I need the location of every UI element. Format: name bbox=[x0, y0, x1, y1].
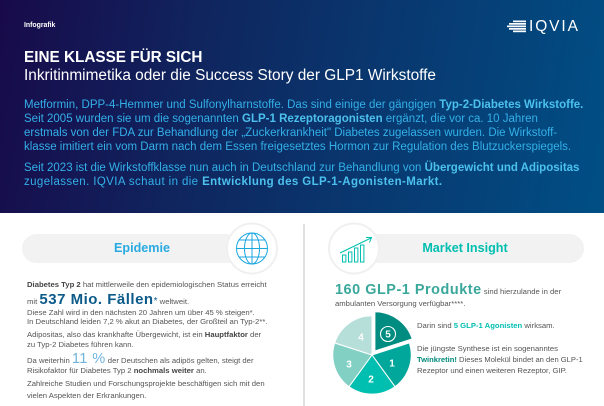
title: EINE KLASSE FÜR SICH bbox=[24, 49, 202, 66]
heading pill: Epidemie bbox=[22, 234, 240, 263]
intro paragraph 1: erstmals von der FDA zur Behandlung der „Zuckerkrankheit" Diabetes zugelassen wurden. Die Wirkstoff- bbox=[24, 127, 557, 139]
subtitle: Inkritinmimetika oder die Success Story der GLP1 Wirkstoffe bbox=[24, 66, 436, 84]
column divider bbox=[303, 224, 305, 406]
text: 11 percent: Da weiterhin 11 % der Deutschen als adipös gelten, steigt der bbox=[27, 350, 254, 366]
text: Twinkretin: Rezeptor und einen weiteren Rezeptor, GIP. bbox=[417, 366, 567, 374]
pie labels: 2 bbox=[368, 374, 374, 386]
text: Germany: In Deutschland leiden 7,2 % akut an Diabetes, der Großteil an Typ-2**. bbox=[27, 317, 267, 326]
text: Twinkretin bbox=[417, 344, 583, 374]
icon: logo stripes bbox=[507, 20, 526, 32]
text: Twinkretin: Die jüngste Synthese ist ein sogenanntes bbox=[417, 344, 558, 352]
logo: IQVIA bbox=[507, 18, 580, 35]
text: studies line 2: vielen Aspekten der Erkrankungen. bbox=[27, 390, 146, 400]
pie chart bbox=[333, 312, 412, 394]
text: availability: ambulanten Versorgung verfügbar****. bbox=[335, 298, 465, 308]
pie labels bbox=[346, 326, 396, 386]
text: 537 Mio. Fällen: mit 537 Mio. Fällen* weltweit. bbox=[27, 290, 189, 308]
slice 3 bbox=[333, 343, 372, 387]
intro paragraph 1: klasse imitiert ein vom Darm nach dem Essen freigesetztes Hormon zur Regulation des Blutzuckerspiegels. bbox=[24, 141, 571, 153]
panel: Epidemie bbox=[22, 222, 278, 400]
heading pill: Market Insight bbox=[349, 234, 584, 263]
text: Twinkretin: Twinkretin! Dieses Molekül bindet an den GLP-1 bbox=[417, 354, 583, 364]
text: studies: Zahlreiche Studien und Forschungsprojekte beschäftigen sich mit den bbox=[27, 378, 265, 388]
pie labels: 3 bbox=[346, 360, 352, 370]
intro paragraph 2: Seit 2023 ist die Wirkstoffklasse nun auch in Deutschland zur Behandlung von Übergewicht und Adipositas bbox=[24, 162, 579, 174]
slice 2 bbox=[349, 355, 395, 394]
intro paragraph 2: zugelassen. IQVIA schaut in die Entwicklung des GLP-1-Agonisten-Markt. bbox=[24, 176, 442, 188]
slice 4 bbox=[335, 316, 372, 355]
text: 5 GLP-1 Agonisten: Darin sind 5 GLP-1 Agonisten wirksam. bbox=[417, 320, 555, 330]
header panel bbox=[0, 0, 604, 213]
pie labels: 5 bbox=[385, 330, 391, 340]
heading pill: Market Insight: Market Insight bbox=[422, 241, 508, 255]
intro paragraph 1: Seit 2005 wurden sie um die sogenannten GLP-1 Rezeptoragonisten ergänzt, die vor ca. 10 Jahren bbox=[24, 113, 538, 125]
slice 5 bbox=[375, 312, 412, 351]
icon: globe bbox=[228, 222, 278, 274]
text: status: Diabetes Typ 2 hat mittlerweile den epidemiologischen Status erreicht bbox=[27, 280, 267, 289]
label: Infografik: Infografik bbox=[24, 22, 55, 29]
text: Adipositas: Adipositas, also das krankhafte Übergewicht, ist ein Hauptfaktor der bbox=[27, 330, 261, 338]
intro paragraph 1 bbox=[24, 99, 583, 153]
pie labels: 1 bbox=[389, 358, 395, 370]
text: risk factor: Risikofaktor für Diabetes Typ 2 nochmals weiter an. bbox=[27, 366, 207, 374]
panel: Market Insight bbox=[328, 222, 584, 394]
heading pill: Epidemie: Epidemie bbox=[114, 241, 170, 255]
text: growth: Diese Zahl wird in den nächsten 20 Jahren um über 45 % steigen*. bbox=[27, 308, 255, 316]
intro paragraph 2 bbox=[24, 160, 579, 188]
intro paragraph 1: Metformin, DPP-4-Hemmer und Sulfonylharnstoffe. Das sind einige der gängigen Typ-2-Diabetes Wirkstoffe. bbox=[24, 99, 583, 111]
text: 160 GLP-1 Produkte: 160 GLP-1 Produkte sind hierzulande in der bbox=[335, 282, 561, 298]
slice 1 bbox=[372, 343, 411, 387]
pie labels: 4 bbox=[358, 332, 364, 344]
logo wordmark: IQVIA bbox=[529, 18, 580, 35]
icon: rising bars bbox=[328, 222, 378, 274]
text: Adipositas line 2: zu Typ-2 Diabetes führen kann. bbox=[27, 340, 134, 348]
